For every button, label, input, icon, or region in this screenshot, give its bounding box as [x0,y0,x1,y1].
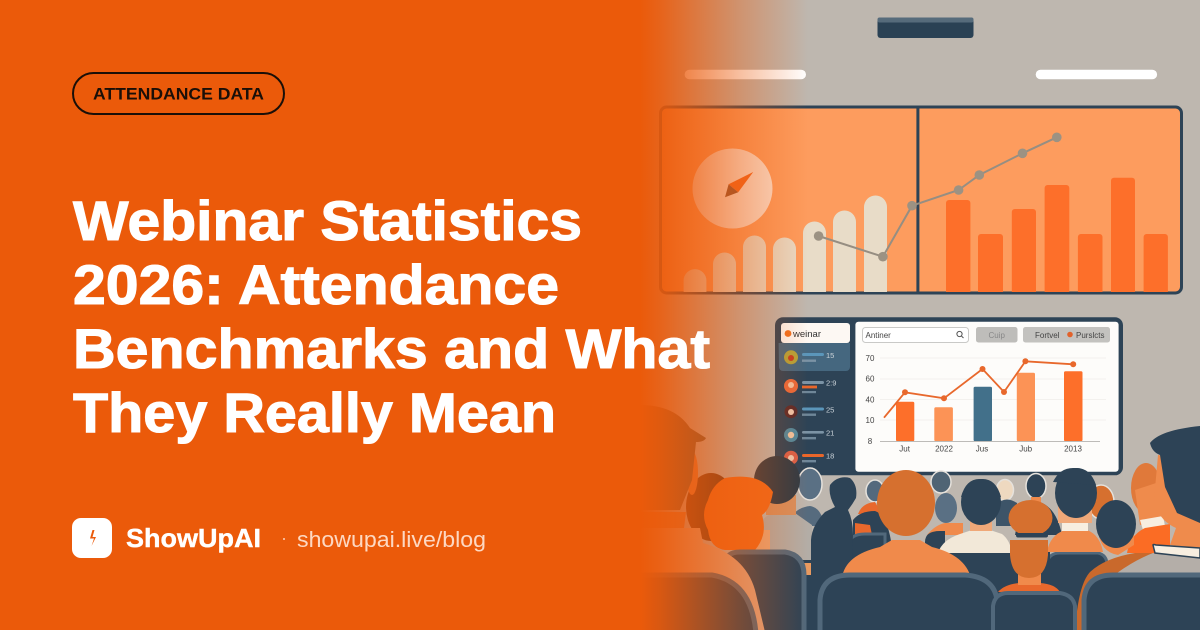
icon: compass [692,148,772,228]
bar and line chart: Jut [899,444,911,454]
bar and line chart: Jus [976,444,988,454]
sidebar active row [779,343,850,371]
sidebar header: weinar [792,329,821,340]
person: brown jacket [1075,553,1160,630]
person: grey jacket man [725,456,812,610]
person: right orange hair [1127,463,1170,553]
bar chart: rounded cream bars [684,196,887,292]
sidebar rows: 18 [826,452,834,460]
person: centre orange hair [842,470,971,578]
bar and line chart: 40 [866,396,875,404]
person: hat [998,500,1060,592]
sidebar rows: 25 [826,406,834,414]
illustration: conference room [632,0,1200,630]
icon: logo [72,518,112,558]
tag: attendance data [73,73,284,114]
button: legend: Fortvel [1035,331,1060,340]
bar and line chart: 60 [866,374,875,384]
title: Benchmarks and What [73,317,710,380]
person: centre left long dark hair [811,477,856,630]
bar and line chart: 70 [866,354,875,363]
sidebar rows [784,378,836,465]
person: left foreground [640,405,765,630]
sidebar rows: 21 [826,428,834,438]
bar and line chart: 8 [868,437,873,446]
blog url: showupai.live/blog [297,527,486,552]
seat: second row left [725,552,815,630]
bar and line chart [866,354,1106,454]
tag: attendance data: ATTENDANCE DATA [93,84,264,104]
person: small dark hair [1096,500,1136,555]
audience [632,405,1200,630]
title [73,189,710,444]
person: left orange hair [686,473,773,550]
sidebar header [781,323,850,343]
bar and line chart: 2022 [935,444,953,454]
ceiling lights [685,70,1157,79]
bar chart: orange bars [946,178,1168,292]
seat row [848,531,1107,630]
button: cup [976,327,1018,342]
search box [862,328,968,342]
bar and line chart: Jub [1019,444,1033,454]
bar and line chart: 2013 [1064,444,1082,454]
button: cup: Cuip [988,331,1005,340]
button: legend [1023,327,1110,342]
title: 2026: Attendance [73,253,559,316]
button: legend: Purslcts [1076,331,1104,340]
title: Webinar Statistics [73,189,582,252]
sidebar rows: 2:9 [826,378,836,388]
sidebar active row: 15 [826,351,834,360]
person: dark hair orange shirt [1047,468,1103,552]
back row [788,468,1114,548]
title: They Really Mean [73,381,556,444]
icon: projector [878,18,974,38]
front row seats [632,575,1200,630]
bar and line chart: 10 [866,416,875,425]
panel: dashboard screen [775,317,1123,475]
separator dot [283,538,285,540]
search box: Antiner [866,331,891,340]
panel: wall display [660,107,1182,293]
brand name: ShowUpAI [126,523,261,553]
person: right foreground [1117,426,1200,630]
left fade overlay [625,0,810,630]
line chart: trend [814,132,1062,262]
person: cream shirt [938,479,1012,553]
